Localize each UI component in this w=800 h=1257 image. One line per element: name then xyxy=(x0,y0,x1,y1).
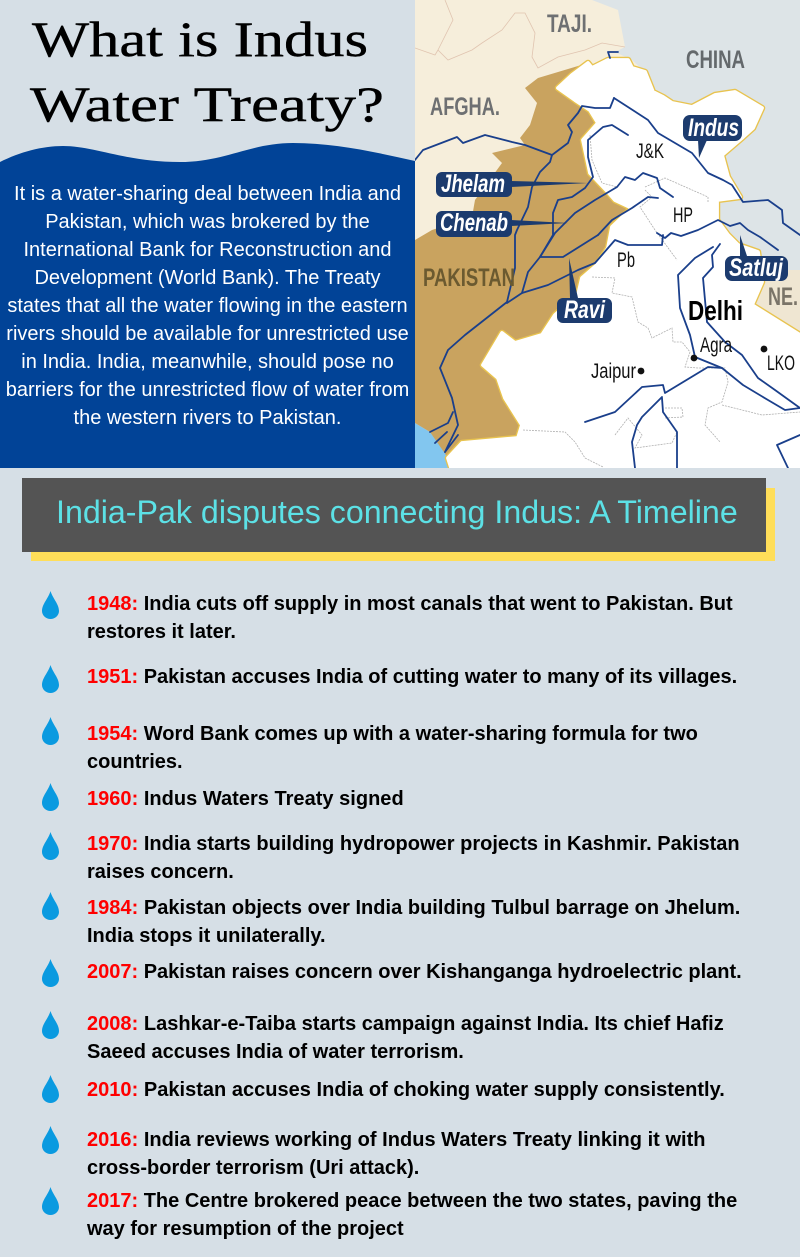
panel: blue wave background xyxy=(0,143,415,468)
country labels: AFGHA. xyxy=(430,93,500,121)
text block: treaty description: states that all the water flowing in the eastern xyxy=(7,294,408,316)
text block: treaty description: Pakistan, which was brokered by the xyxy=(45,210,370,232)
timeline item: 1970 xyxy=(42,832,740,883)
place labels: HP xyxy=(673,204,693,227)
timeline item: 1954: 1954: Word Bank comes up with a water-sharing formula for two xyxy=(87,723,698,745)
timeline item: 2008: Saeed accuses India of water terrorism. xyxy=(87,1041,464,1063)
text block: treaty description: rivers should be available for unrestricted use xyxy=(6,322,409,344)
map of the Indus basin: Jhelam xyxy=(441,170,505,198)
text block: treaty description xyxy=(6,182,409,428)
timeline item: 2007: 2007: Pakistan raises concern over Kishanganga hydroelectric plant. xyxy=(87,961,742,983)
timeline item: 1954 xyxy=(42,717,698,773)
country labels: PAKISTAN xyxy=(423,264,515,292)
timeline item: 1984: India stops it unilaterally. xyxy=(87,925,326,947)
timeline item: 2010: 2010: Pakistan accuses India of choking water supply consistently. xyxy=(87,1079,725,1101)
timeline heading: India-Pak disputes connecting Indus: A Timeline xyxy=(56,494,738,530)
timeline item: 1984 xyxy=(42,892,740,947)
map of the Indus basin: Ravi xyxy=(564,296,606,324)
timeline item: 1948: restores it later. xyxy=(87,621,236,643)
timeline item: 1948 xyxy=(42,591,733,643)
place labels xyxy=(591,140,795,383)
place labels: Pb xyxy=(617,249,635,272)
timeline item: 2016 xyxy=(42,1126,706,1179)
timeline item: 2008: 2008: Lashkar-e-Taiba starts campaign against India. Its chief Hafiz xyxy=(87,1013,724,1035)
text block: treaty description: International Bank for Reconstruction and xyxy=(24,238,392,260)
rivers xyxy=(415,52,800,468)
river callouts xyxy=(436,115,788,323)
timeline item: 1984: 1984: Pakistan objects over India building Tulbul barrage on Jhelum. xyxy=(87,897,740,919)
map of the Indus basin: Indus xyxy=(688,114,739,142)
text block: treaty description: the western rivers to Pakistan. xyxy=(74,406,341,428)
text block: treaty description: Development (World Bank). The Treaty xyxy=(34,266,381,288)
timeline item: 2016: cross-border terrorism (Uri attack). xyxy=(87,1157,419,1179)
country labels: CHINA xyxy=(686,46,745,74)
timeline item: 1970: raises concern. xyxy=(87,861,234,883)
text block: treaty description: It is a water-sharing deal between India and xyxy=(14,182,401,204)
place labels: Jaipur xyxy=(591,360,636,383)
text block: treaty description: barriers for the unrestricted flow of water from xyxy=(6,378,409,400)
place labels: Agra xyxy=(700,334,732,357)
timeline item: 1970: 1970: India starts building hydropower projects in Kashmir. Pakistan xyxy=(87,833,740,855)
timeline item: 2017 xyxy=(42,1187,737,1240)
place labels: J&K xyxy=(636,140,664,163)
title: Water Treaty? xyxy=(30,76,384,132)
timeline item: 1951: 1951: Pakistan accuses India of cutting water to many of its villages. xyxy=(87,666,737,688)
title: What is Indus xyxy=(32,11,368,67)
map of the Indus basin: Chenab xyxy=(440,209,508,237)
timeline item: 2017: way for resumption of the project xyxy=(87,1218,404,1240)
timeline item: 1960 xyxy=(42,783,404,811)
country labels: TAJI. xyxy=(547,10,592,38)
timeline item: 1960: 1960: Indus Waters Treaty signed xyxy=(87,788,404,810)
text block: treaty description: in India. India, meanwhile, should pose no xyxy=(21,350,394,372)
map of the Indus basin xyxy=(415,0,800,468)
title xyxy=(30,11,384,132)
timeline heading xyxy=(22,478,775,561)
timeline item: 1948: 1948: India cuts off supply in most canals that went to Pakistan. But xyxy=(87,593,733,615)
timeline item: 2016: 2016: India reviews working of Indus Waters Treaty linking it with xyxy=(87,1129,706,1151)
timeline item: 2017: 2017: The Centre brokered peace between the two states, paving the xyxy=(87,1190,737,1212)
timeline item: 1954: countries. xyxy=(87,751,183,773)
country labels xyxy=(423,10,798,311)
timeline item: 2008 xyxy=(42,1011,724,1063)
place labels: Delhi xyxy=(688,295,743,326)
map of the Indus basin: Satluj xyxy=(729,254,784,282)
